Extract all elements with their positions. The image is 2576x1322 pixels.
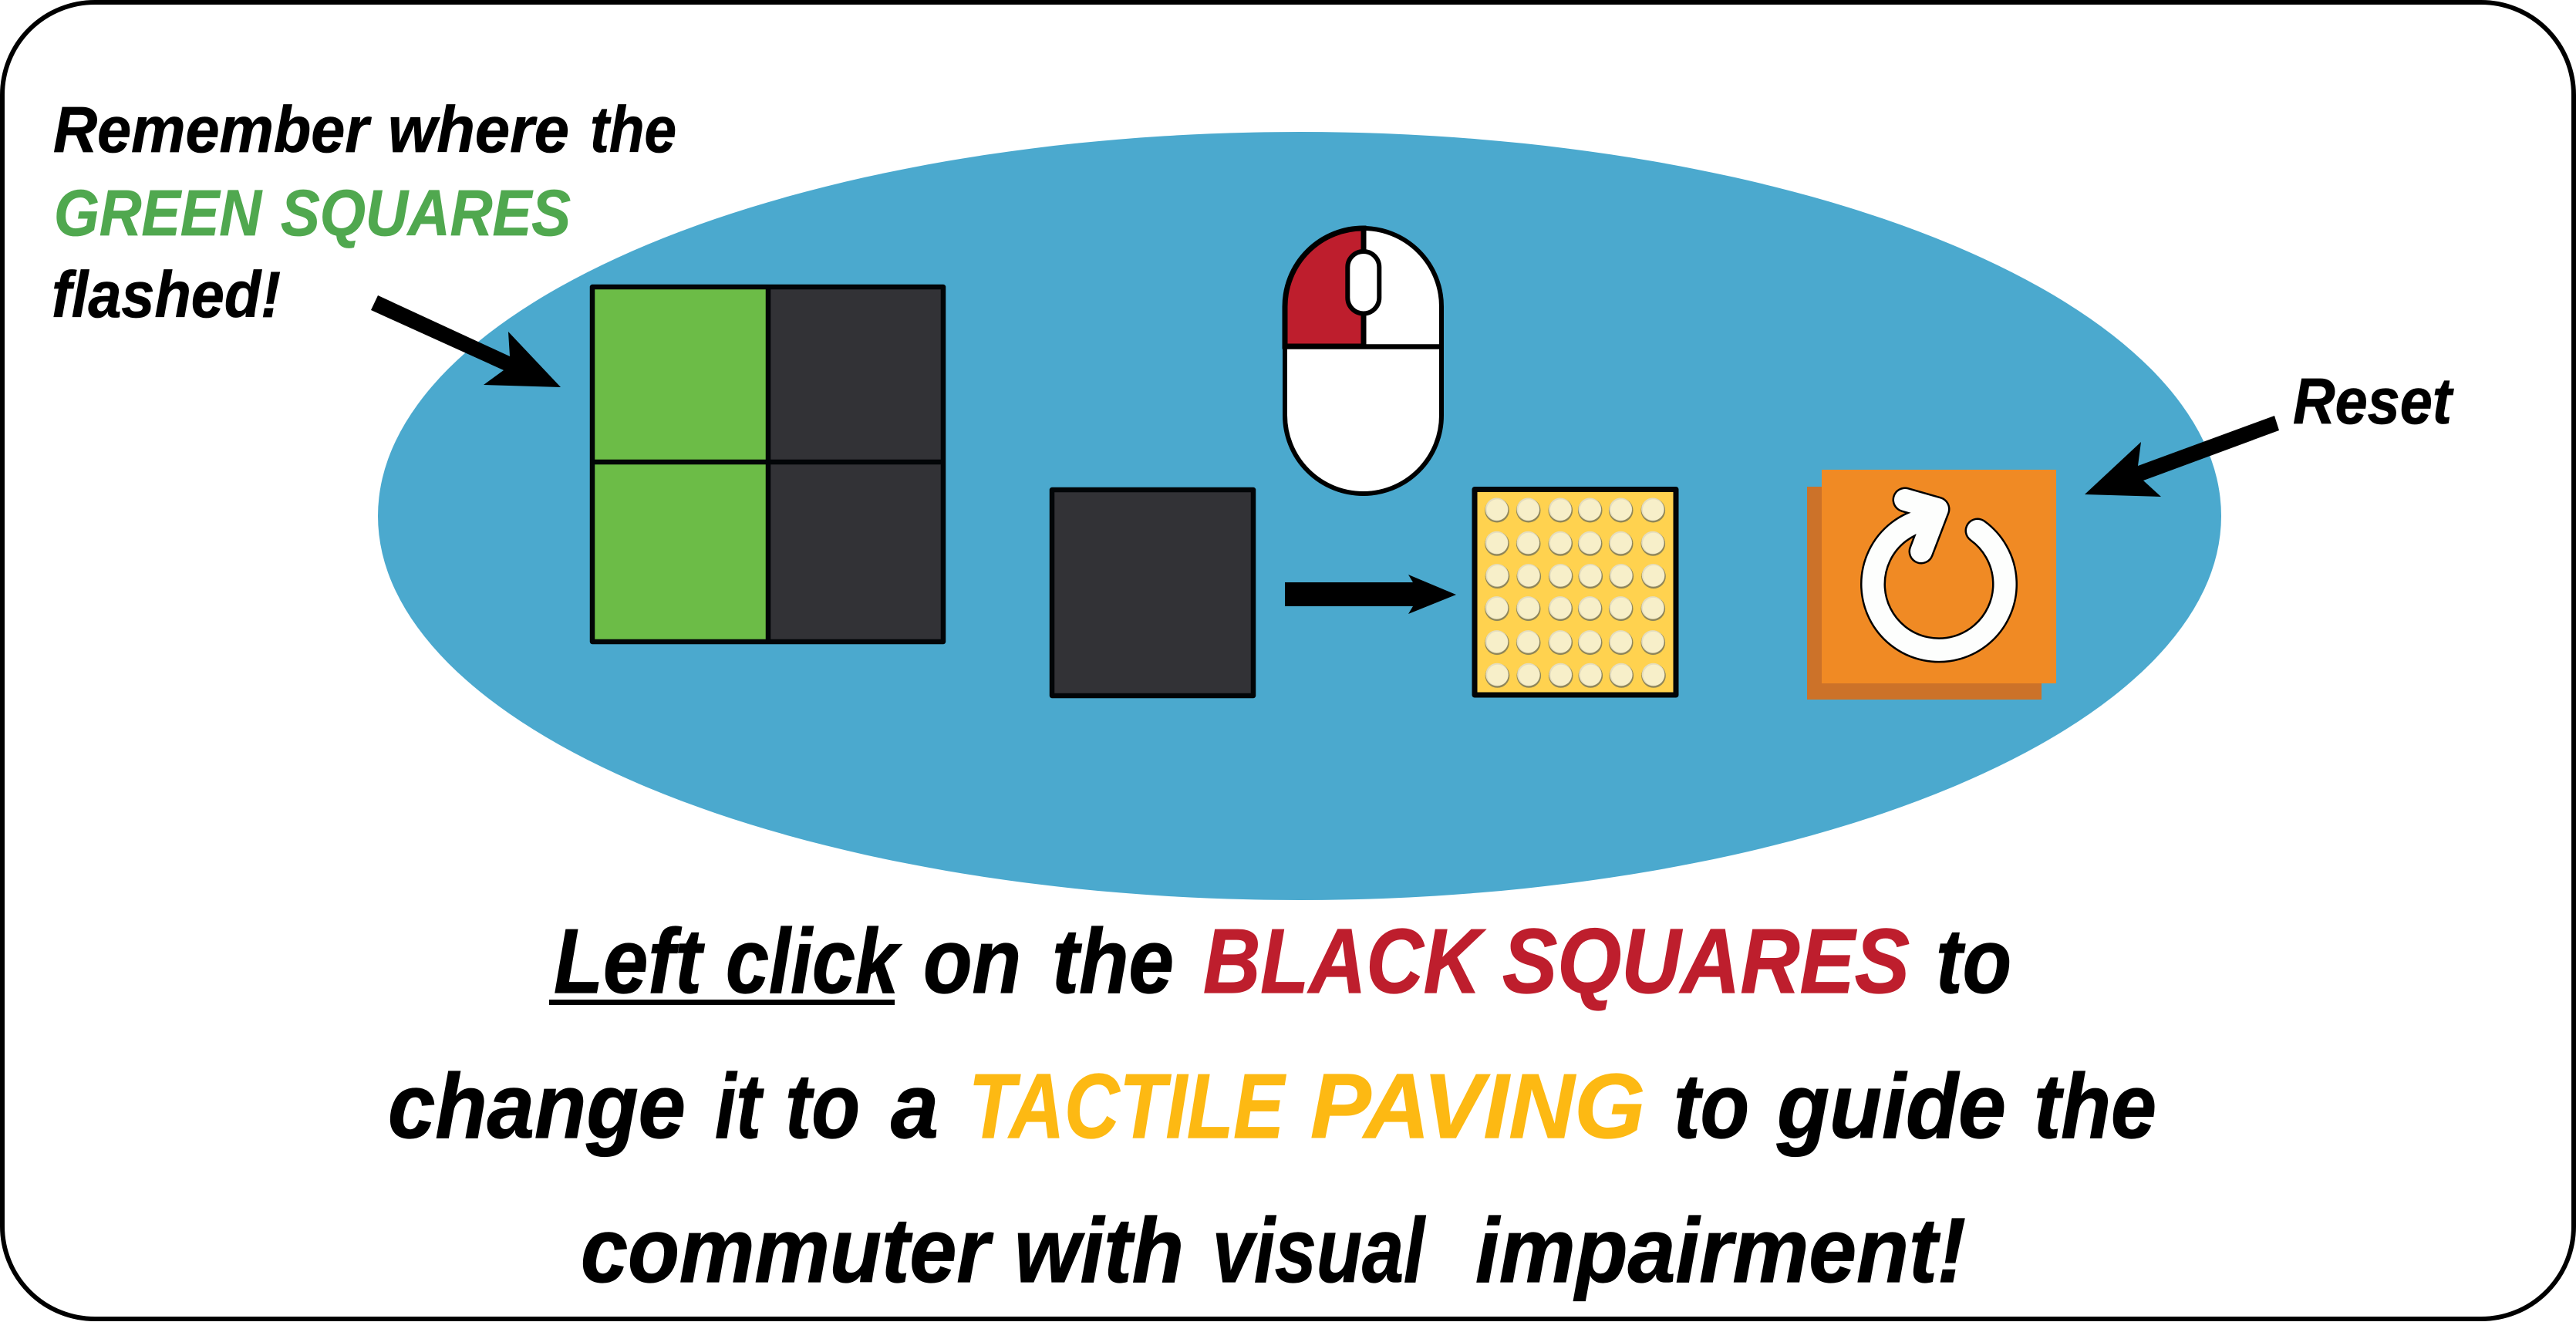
arrow: black square becomes tactile paving <box>1285 575 1456 614</box>
text: remember green squares: SQUARES <box>281 177 571 249</box>
label: reset: Reset <box>2293 365 2454 437</box>
line 3: impairment! <box>1475 1199 1966 1302</box>
line 2: to <box>785 1055 860 1158</box>
line 2: the <box>2034 1055 2156 1158</box>
line 2: change <box>388 1055 686 1158</box>
line 1: Left <box>554 910 705 1013</box>
black square <box>1052 490 1253 696</box>
line 2: guide <box>1776 1055 2006 1158</box>
text: remember green squares: GREEN <box>54 177 263 249</box>
line 1: on <box>923 910 1021 1013</box>
line 1: BLACK <box>1203 910 1486 1013</box>
text: remember green squares: Remember <box>53 93 372 166</box>
line 1 <box>549 910 2011 1013</box>
text: remember green squares <box>52 93 676 331</box>
line 2: it <box>715 1055 764 1158</box>
text: remember green squares: flashed! <box>52 258 281 331</box>
line 3 <box>581 1199 1966 1302</box>
arrow: pointing to green squares <box>371 295 561 387</box>
text: remember green squares: where <box>388 93 569 166</box>
line 1: click <box>726 910 902 1013</box>
instructions <box>388 910 2156 1302</box>
line 2: PAVING <box>1310 1055 1645 1158</box>
tactile paving tile <box>1475 489 1676 695</box>
icon: mouse with left button highlighted <box>1285 228 1441 494</box>
text: remember green squares: the <box>590 93 676 166</box>
line 3: with <box>1014 1199 1184 1302</box>
line 3: commuter <box>581 1199 993 1302</box>
line 2: TACTILE <box>969 1055 1286 1158</box>
line 2 <box>388 1055 2156 1158</box>
line 2: a <box>891 1055 939 1158</box>
line 2: to <box>1674 1055 1749 1158</box>
button: reset <box>1807 470 2056 700</box>
blue ellipse backdrop <box>378 132 2221 900</box>
line 1: to <box>1936 910 2011 1013</box>
line 1: SQUARES <box>1502 910 1910 1013</box>
line 3: visual <box>1212 1199 1426 1302</box>
line 1: the <box>1052 910 1174 1013</box>
arrow: pointing to reset <box>2085 416 2279 497</box>
grid: four squares, two flashed green <box>592 287 943 642</box>
